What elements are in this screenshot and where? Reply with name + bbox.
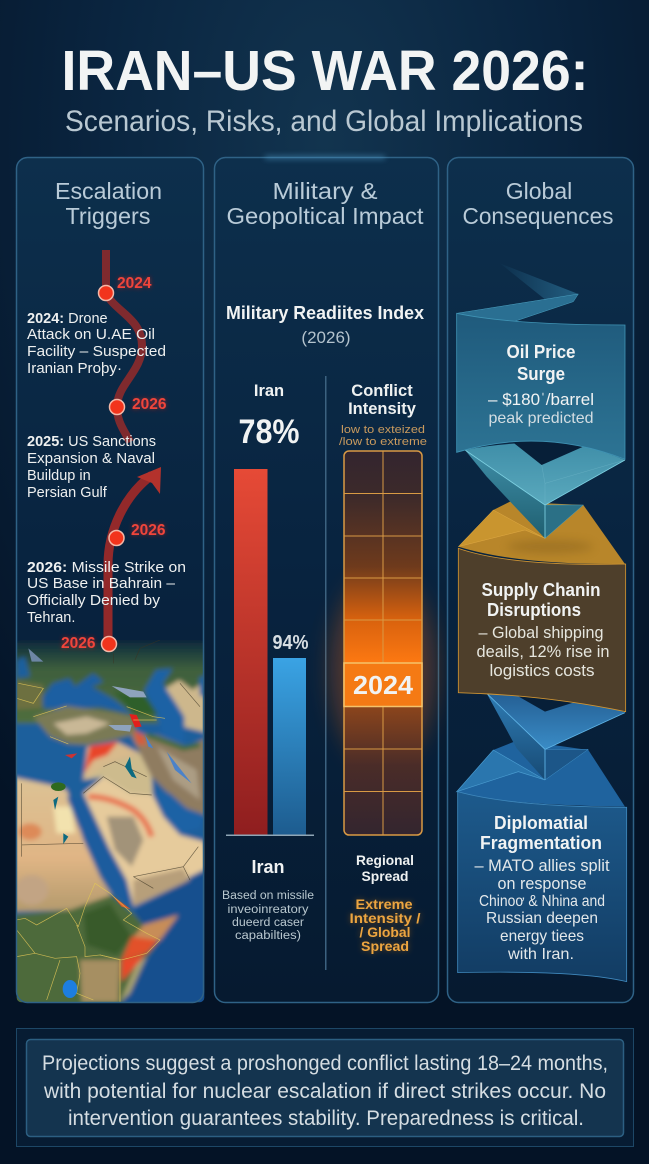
text block: 2025 event: Expansion & Naval xyxy=(27,451,155,467)
note: based on missile inventory xyxy=(222,890,314,942)
footer text: with potential for nuclear escalation if direct strikes occur. No xyxy=(43,1080,606,1103)
chart subtitle: (2026) xyxy=(301,328,351,347)
ribbon: supply chain disruptions xyxy=(458,502,626,712)
text block: 2025 event: 2025: US Sanctions xyxy=(27,434,156,450)
text: oil price surge: – $180ˈ/barrel xyxy=(488,390,594,409)
text: diplomatic fragmentation: Fragmentation xyxy=(480,833,602,853)
title: IRAN–US WAR 2026: xyxy=(62,39,588,103)
text block: 2024 event xyxy=(27,311,166,377)
label: iran: Iran xyxy=(254,382,284,400)
heading: global consequences xyxy=(462,178,614,229)
text block: 2026 event: US Base in Bahrain – xyxy=(27,576,176,592)
panel: escalation triggers xyxy=(10,158,210,1010)
text: supply chain disruptions: Disruptions xyxy=(487,600,581,620)
text: supply chain disruptions: – Global shipping xyxy=(478,624,604,642)
text block: 2024 event: Attack on U.AE Oil xyxy=(27,327,155,343)
label: regional spread xyxy=(356,852,414,884)
label: iran lower: Iran xyxy=(251,857,285,877)
text: diplomatic fragmentation: Diplomatial xyxy=(494,813,588,833)
heading: conflict intensity: Conflict xyxy=(351,382,413,400)
text block: 2025 event: Persian Gulf xyxy=(27,485,108,501)
footer text xyxy=(42,1052,608,1130)
heading: global consequences: Consequences xyxy=(462,203,614,229)
text: supply chain disruptions: logistics costs xyxy=(490,662,594,680)
label: regional spread: Spread xyxy=(362,868,408,884)
footer text: intervention guarantees stability. Preparedness is critical. xyxy=(68,1107,584,1130)
text block: 2025 event xyxy=(27,434,156,501)
value: 94 percent: 94% xyxy=(272,632,309,654)
timeline node: 2026 second xyxy=(109,522,166,546)
text: oil price surge: peak predicted xyxy=(488,410,594,427)
text: diplomatic fragmentation: on response xyxy=(498,875,586,893)
text: diplomatic fragmentation: Chinoơ & Nhina and xyxy=(479,893,605,910)
text: supply chain disruptions: deails, 12% rise in xyxy=(476,643,610,661)
hot zones xyxy=(112,714,142,909)
heading: military and geopolitical impact: Military & xyxy=(272,178,378,204)
timeline node: 2026 third: 2026 xyxy=(61,635,96,652)
timeline node: 2026 first xyxy=(110,396,167,414)
callout: extreme intensity: Intensity / xyxy=(350,911,421,926)
scale note xyxy=(339,424,427,448)
note: based on missile inventory: dueerd caser xyxy=(232,917,304,929)
heading: global consequences: Global xyxy=(506,178,572,204)
heading: escalation triggers xyxy=(55,178,162,229)
panel: global consequences xyxy=(448,158,634,1002)
timeline node: 2026 second: 2026 xyxy=(131,522,166,539)
bar: second country xyxy=(273,658,306,835)
timeline path xyxy=(106,250,161,645)
ribbon: oil price surge xyxy=(457,263,625,459)
terrain xyxy=(10,633,210,1010)
scale note: low to exteized xyxy=(341,424,425,436)
timeline node: 2026 first: 2026 xyxy=(132,396,167,413)
text: diplomatic fragmentation: Russian deepen xyxy=(486,910,598,927)
text block: 2026 event: 2026: Missile Strike on xyxy=(27,560,186,576)
timeline node: 2024: 2024 xyxy=(117,275,152,292)
text block: 2026 event: Officially Denied by xyxy=(27,593,161,609)
callout: extreme intensity: Spread xyxy=(361,939,409,954)
footer callout xyxy=(16,1028,634,1146)
heading: conflict intensity xyxy=(348,382,417,418)
text block: 2025 event: Buildup in xyxy=(27,468,91,484)
heading: escalation triggers: Triggers xyxy=(66,203,150,229)
bar: iran xyxy=(234,469,268,835)
chart title: Military Readiites Index xyxy=(226,303,424,323)
text block: 2026 event: Tehran. xyxy=(27,610,75,626)
callout: extreme intensity: / Global xyxy=(360,925,410,940)
label: regional spread: Regional xyxy=(356,852,414,868)
map of the middle east xyxy=(10,633,210,1010)
divider xyxy=(325,376,326,970)
scale note: /low to extreme xyxy=(339,436,427,448)
panel: military and geopolitical impact xyxy=(214,156,438,1002)
timeline node: 2024 xyxy=(98,275,152,300)
heading: escalation triggers: Escalation xyxy=(55,178,162,204)
text block: 2024 event: 2024: Drone xyxy=(27,311,108,327)
ribbon: diplomatic fragmentation xyxy=(457,740,627,982)
value: 78 percent: 78% xyxy=(238,413,300,451)
value: 2024: 2024 xyxy=(353,670,414,700)
subtitle: Scenarios, Risks, and Global Implications xyxy=(65,105,583,138)
connector: blue fold xyxy=(487,692,625,780)
note: based on missile inventory: inveoinreatory xyxy=(228,904,309,916)
heat gauge: conflict intensity xyxy=(331,451,435,835)
lake victoria xyxy=(63,980,77,998)
heading: military and geopolitical impact xyxy=(226,178,424,229)
footer text: Projections suggest a proshonged conflict lasting 18–24 months, xyxy=(42,1052,608,1075)
heading: military and geopolitical impact: Geopoltical Impact xyxy=(226,203,424,229)
callout: extreme intensity: Extreme xyxy=(356,897,413,912)
text block: 2024 event: Facility – Suspected xyxy=(27,344,166,360)
heading: conflict intensity: Intensity xyxy=(348,400,417,418)
aircraft silhouettes xyxy=(112,686,147,697)
connector: teal fold xyxy=(465,440,625,538)
text: oil price surge: Oil Price xyxy=(506,342,576,362)
text: supply chain disruptions: Supply Chanin xyxy=(482,580,600,600)
text block: 2024 event: Iranian Proþy· xyxy=(27,361,122,377)
note: based on missile inventory: Based on missile xyxy=(222,890,314,902)
callout: extreme intensity xyxy=(350,897,421,954)
text: oil price surge xyxy=(488,342,594,427)
text: diplomatic fragmentation: – MATO allies split xyxy=(474,857,610,875)
text: oil price surge: Surge xyxy=(517,364,565,384)
rivers and lakes xyxy=(53,757,137,844)
text: diplomatic fragmentation: with Iran. xyxy=(507,946,574,963)
bar chart: military readiness xyxy=(226,382,314,836)
text block: 2026 event xyxy=(27,560,186,626)
timeline node: 2026 third xyxy=(61,635,116,652)
text: diplomatic fragmentation: energy tiees xyxy=(500,928,584,945)
text: supply chain disruptions xyxy=(476,580,610,680)
note: based on missile inventory: capabilties) xyxy=(235,930,301,942)
text: diplomatic fragmentation xyxy=(474,813,610,963)
borders xyxy=(17,683,165,1002)
